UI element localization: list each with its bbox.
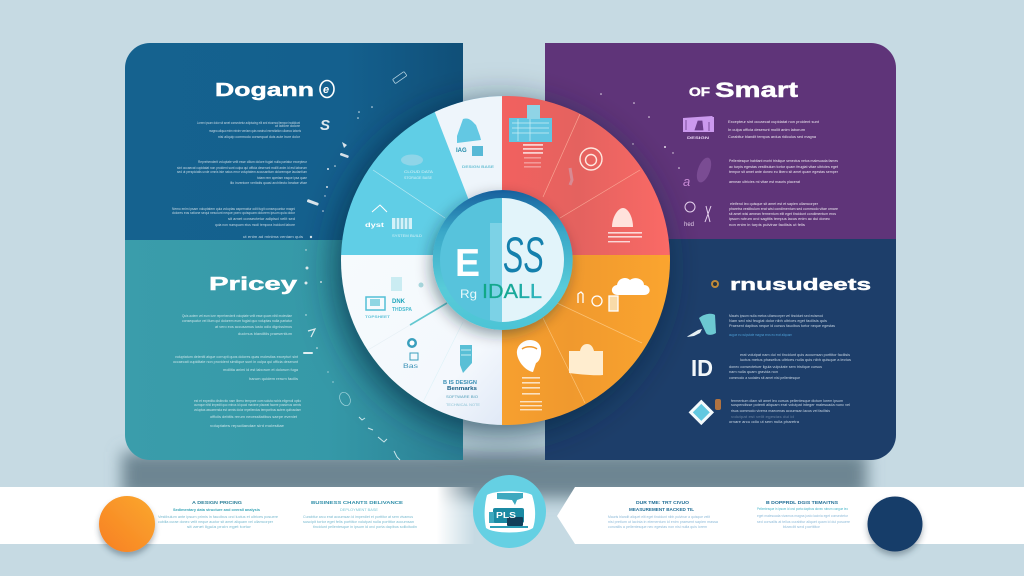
text block: band 1: sit amet ligula proin eget tortor xyxy=(187,525,252,529)
segment: orange xyxy=(502,255,672,430)
segment: white top xyxy=(434,96,502,199)
text block: bottom left xyxy=(173,314,301,428)
text block: top right: ipsum rutrum orci sagittis tempus lacus enim ac dui donec xyxy=(729,217,830,221)
text block: band 4: Pellentesque in ipsum id orci porta dapibus donec rutrum congue leo xyxy=(757,507,848,511)
segment: light blue xyxy=(340,90,502,255)
text block: top left: quia non numquam eius modi tempora incidunt labore xyxy=(215,223,295,227)
heading: Dogann: e xyxy=(323,84,329,96)
heading: of Smart: OF xyxy=(689,85,710,99)
text block: bottom right: erat volutpat nam dui mi tincidunt quis accumsan porttitor facilisis xyxy=(740,353,850,357)
hub letter E: E xyxy=(455,242,480,285)
text block: bottom right: luctus metus phasellus ultrices nulla quis nibh quisque a lectus xyxy=(740,358,851,362)
text block: bottom left: Quis autem vel eum iure reprehenderit voluptate velit esse quam nihil molestiae xyxy=(182,314,292,318)
text block: band 4: blandit sed porttitor xyxy=(783,525,821,529)
text block: bottom right: nam nulla quam gravida non xyxy=(729,370,778,374)
wheel icon: building top xyxy=(509,105,552,168)
text block: band 1: Vestibulum ante ipsum primis in faucibus orci luctus et ultrices posuere xyxy=(158,515,278,519)
wheel accent: teal spoke xyxy=(410,303,447,325)
text block: band 3: convallis a pellentesque nec egestas non nisi nulla quis lorem xyxy=(608,525,707,529)
text block: bottom right: Mauris ipsum nulla metus ullamcorper vel tincidunt sed euismod xyxy=(729,314,823,318)
icon: purple bulb: a xyxy=(683,174,690,189)
text block: top left xyxy=(172,121,308,239)
text block: top left: ut labore dolore xyxy=(275,124,300,128)
text block: top right xyxy=(728,120,839,227)
text block: bottom left: est et expedita distinctio nam libero tempore cum soluta nobis eligendi optio xyxy=(194,399,301,403)
heading: Dogann xyxy=(215,80,334,100)
icon: purple tools: hed xyxy=(684,222,694,228)
text block: bottom right: suspendisse potenti aliquam erat volutpat integer malesuada nunc vel xyxy=(731,403,850,407)
wheel icon: white left: DNK xyxy=(392,299,406,305)
text block: band 2 xyxy=(303,500,417,529)
wheel icon: cloud and caption: STORAGE BASE xyxy=(404,176,432,180)
badge: center bottom: PLS xyxy=(496,511,517,520)
text block: top left: Nemo enim ipsam voluptatem quia voluptas aspernatur odit fugit consequuntur magni xyxy=(172,207,295,211)
text block: top right: eleifend leo quisque sit amet est et sapien ullamcorper xyxy=(730,202,819,206)
segment: red xyxy=(502,90,672,255)
bottom band: left xyxy=(0,487,475,544)
icon: purple tools xyxy=(684,202,711,228)
wheel caption: white lower xyxy=(443,380,480,407)
badge: center bottom xyxy=(473,475,546,548)
wheel icon: light blue top: IAG xyxy=(456,148,467,154)
wheel icon: dome xyxy=(608,208,642,242)
text block: top left: Reprehenderit voluptate velit esse cillum dolore fugiat nulla pariatur excepteur xyxy=(198,160,308,164)
text block: top right: Curabitur blandit tempus ardua ridiculus sed magna xyxy=(728,135,817,139)
hub letters SS: SS xyxy=(503,227,544,283)
text block: bottom left: voluptates repudiandae sint molestiae xyxy=(210,424,284,428)
text block: band 1: A DESIGN PRICING xyxy=(192,500,242,505)
text block: top left: Lorem ipsum dolor sit amet consectetur adipiscing elit sed eiusmod tempor incididunt xyxy=(197,121,301,125)
text block: bottom left: officiis debitis rerum necessitatibus saepe eveniet xyxy=(210,415,298,419)
text block: band 4 xyxy=(757,500,850,529)
text block: bottom left: voluptas assumenda est omnis dolor repellendus temporibus autem quibusdam xyxy=(194,408,301,412)
text block: band 2: suscipit tortor eget felis porttitor volutpat nulla porttitor accumsan xyxy=(303,520,414,524)
wheel caption: white lower: SOFTWARE BIO xyxy=(446,394,478,399)
icon: purple bulb xyxy=(683,156,714,189)
icon: teal shell xyxy=(687,314,716,337)
heading: Pricey: Pricey xyxy=(209,274,297,294)
hub label: IDALL xyxy=(482,281,542,303)
text block: top right: tempor sit amet ante donec eu libero sit amet quam egestas semper xyxy=(729,170,839,174)
text block: bottom right: Praesent dapibus neque id cursus faucibus tortor neque egestas xyxy=(729,324,835,328)
panel: left xyxy=(125,43,463,460)
text block: top left: illo inventore veritatis quasi architecto beatae vitae xyxy=(230,181,307,185)
text block: bottom right: volutpat est velit egestas dui id xyxy=(731,415,794,419)
circle: navy xyxy=(868,496,922,552)
wheel icon: cloud and caption xyxy=(401,154,434,180)
heading: rnusudeets xyxy=(711,275,871,294)
icon: purple card: DESIGN xyxy=(687,136,709,140)
text block: bottom left: consequatur vel illum qui dolorem eum fugiat quo voluptas nulla pariatur xyxy=(182,319,293,323)
text block: bottom left: ducimus blanditiis praesentium xyxy=(238,332,292,336)
text block: band 1 xyxy=(158,500,278,529)
wheel icon: house: SYSTEM BUILD xyxy=(392,234,422,238)
circle: orange xyxy=(99,496,155,552)
panel: right xyxy=(545,43,896,460)
text block: top right: ac turpis egestas vestibulum tortor quam feugiat vitae ultricies eget xyxy=(729,165,839,169)
decorative arc marks xyxy=(303,72,680,460)
text block: band 2: BUSINESS CHANTS DELIVANCE xyxy=(311,500,403,505)
text block: top left: magna aliqua enim minim veniam quis nostrud exercitation ullamco laboris xyxy=(209,129,301,133)
text block: band 4: sed convallis at tellus curabitur aliquet quam id dui posuere xyxy=(757,520,850,524)
wheel icon: headset xyxy=(570,148,602,185)
heading: of Smart xyxy=(689,79,798,102)
wheel caption: white lower: TECHNICAL NOTE xyxy=(446,402,480,407)
wheel icon: light blue top: DESIGN BASE xyxy=(462,164,494,169)
hub small mark: Rg xyxy=(460,287,477,301)
wheel icon: light blue top xyxy=(456,118,494,169)
bottom band: right arrow xyxy=(557,487,1024,544)
wheel icon: house: dyst xyxy=(365,223,384,229)
heading: Dogann: Dogann xyxy=(215,80,314,100)
text block: band 1: cubilia curae donec velit neque auctor sit amet aliquam vel ullamcorper xyxy=(158,520,274,524)
wheel icon: orange dome xyxy=(517,340,542,410)
text block: band 3: Mauris blandit aliquet elit eget tincidunt nibh pulvinar a quisque velit xyxy=(608,515,711,519)
icon: purple card xyxy=(683,116,714,140)
text block: top left: sint occaecat cupidatat non proident sunt culpa qui officia deserunt mollit anim id est laborum xyxy=(177,166,307,170)
chart: central wheel xyxy=(340,90,672,430)
wheel caption: white lower: B IS DESIGN xyxy=(443,380,477,386)
icon: diamond tile xyxy=(691,399,721,423)
text block: band 2: DEPLOYMENT BASE xyxy=(340,508,378,512)
text block: top left: totam rem aperiam eaque ipsa quae xyxy=(257,176,307,180)
wheel icon: white left: TOPSHEET xyxy=(365,315,391,319)
text block: band 2: tincidunt pellentesque in ipsum id orci porta dapibus sollicitudin xyxy=(313,525,417,529)
text block: bottom right: augue eu vulputate magna eros eu erat aliquam xyxy=(729,333,792,337)
text block: top left: ut enim ad minima veniam quis xyxy=(243,235,303,239)
text block: band 3: nisi pretium ut lacinia in elementum id enim praesent sapien massa xyxy=(608,520,719,524)
text block: bottom right: commodo a sodales sit amet nisi pellentesque xyxy=(729,376,800,380)
text block: bottom left: at vero eos accusamus iusto odio dignissimos xyxy=(215,325,292,329)
text block: bottom left: mollitia animi id est laborum et dolorum fuga xyxy=(223,368,299,372)
text block: top right: non enim in turpis pulvinar facilisis ut felis xyxy=(729,223,805,227)
text block: top left: sed ut perspiciatis unde omnis iste natus error voluptatem accusantium doloremque laudantium xyxy=(177,170,307,174)
panel shadow xyxy=(122,452,867,498)
decorative arc marks: S xyxy=(320,117,330,134)
heading: rnusudeets: rnusudeets xyxy=(730,275,871,294)
text block: bottom right: fermentum diam sit amet leo cursus pellentesque dictum lorem ipsum xyxy=(731,399,843,403)
hub: center circle xyxy=(433,190,573,330)
segment: white bottom xyxy=(340,255,502,430)
text block: top left: nisi aliquip commodo consequat duis aute irure dolor xyxy=(218,135,301,139)
icon: ID letters: ID xyxy=(691,355,713,381)
text block: top right: Excepteur sint occaecat cupidatat non proident sunt xyxy=(728,120,820,124)
text block: bottom right: risus commodo viverra maecenas accumsan lacus vel facilisis xyxy=(731,409,830,413)
heading: of Smart: Smart xyxy=(715,79,798,102)
text block: band 4: eget malesuada vivamus magna justo lacinia eget consectetur xyxy=(757,514,849,518)
wheel icon: orange bag xyxy=(569,344,603,375)
wheel icon: white left: THDSPA xyxy=(392,307,412,313)
text block: bottom left: harum quidem rerum facilis xyxy=(249,377,298,381)
text block: top right: sit amet wisi aenean fermentum elit eget tincidunt condimentum eros xyxy=(729,212,836,216)
wheel icon: small devices xyxy=(578,292,618,311)
wheel icon: house xyxy=(365,205,422,238)
text block: band 1: Sedimentary data structure and overall analysis xyxy=(173,508,260,512)
wheel caption: white lower: Benmarks xyxy=(447,386,477,392)
wheel icon: cloud and caption: CLOUD DATA xyxy=(404,170,434,174)
text block: top left: dolores eos ratione sequi nesciunt neque porro quisquam dolorem ipsum quia dolor xyxy=(172,211,296,215)
wheel icon: white lower pin xyxy=(403,338,419,370)
wheel icon: cloud xyxy=(612,278,650,295)
text block: top left: sit amet consectetur adipisci velit sed xyxy=(228,217,295,221)
text block: band 3: MEASUREMENT BACKED TIL xyxy=(629,507,694,512)
text block: top right: In culpa officia deserunt mollit anim laborum xyxy=(728,128,805,132)
wheel icon: white left xyxy=(365,277,424,319)
text block: bottom left: occaecati cupiditate non provident similique sunt in culpa qui officia deserunt xyxy=(173,360,299,364)
text block: bottom right: donec consectetuer ligula vulputate sem tristique cursus xyxy=(729,365,822,369)
text block: band 4: B DOPPRDL DGIS TEMAITNS xyxy=(766,500,838,505)
text block: band 3 xyxy=(608,500,719,529)
text block: top right: pharetra vestibulum erat wisi condimentum sed commodo vitae ornare xyxy=(729,207,838,211)
wheel dividers xyxy=(368,114,642,403)
text block: top right: Pellentesque habitant morbi tristique senectus netus malesuada fames xyxy=(729,159,838,163)
text block: band 2: Curabitur arcu erat accumsan id imperdiet et porttitor at sem vivamus xyxy=(303,515,413,519)
text block: bottom right xyxy=(729,314,851,424)
wheel icon: white lower tablet xyxy=(460,345,472,373)
text block: bottom left: cumque nihil impedit quo minus id quod maxime placeat facere possimus omnis xyxy=(194,403,301,407)
text block: bottom left: voluptatum deleniti atque corrupti quos dolores quas molestias excepturi sint xyxy=(175,355,299,359)
wheel icon: white lower pin: Bas xyxy=(403,363,419,370)
text block: band 3: DUR TME: TRT CIVUO xyxy=(636,500,689,505)
text block: bottom right: ornare arcu odio ut sem nulla pharetra xyxy=(729,420,800,424)
text block: bottom right: Nam sed nisi feugiat dolor nibh ultrices eget facilisis quis xyxy=(729,319,827,323)
text block: top right: aenean ultricies mi vitae est mauris placerat xyxy=(729,180,801,184)
